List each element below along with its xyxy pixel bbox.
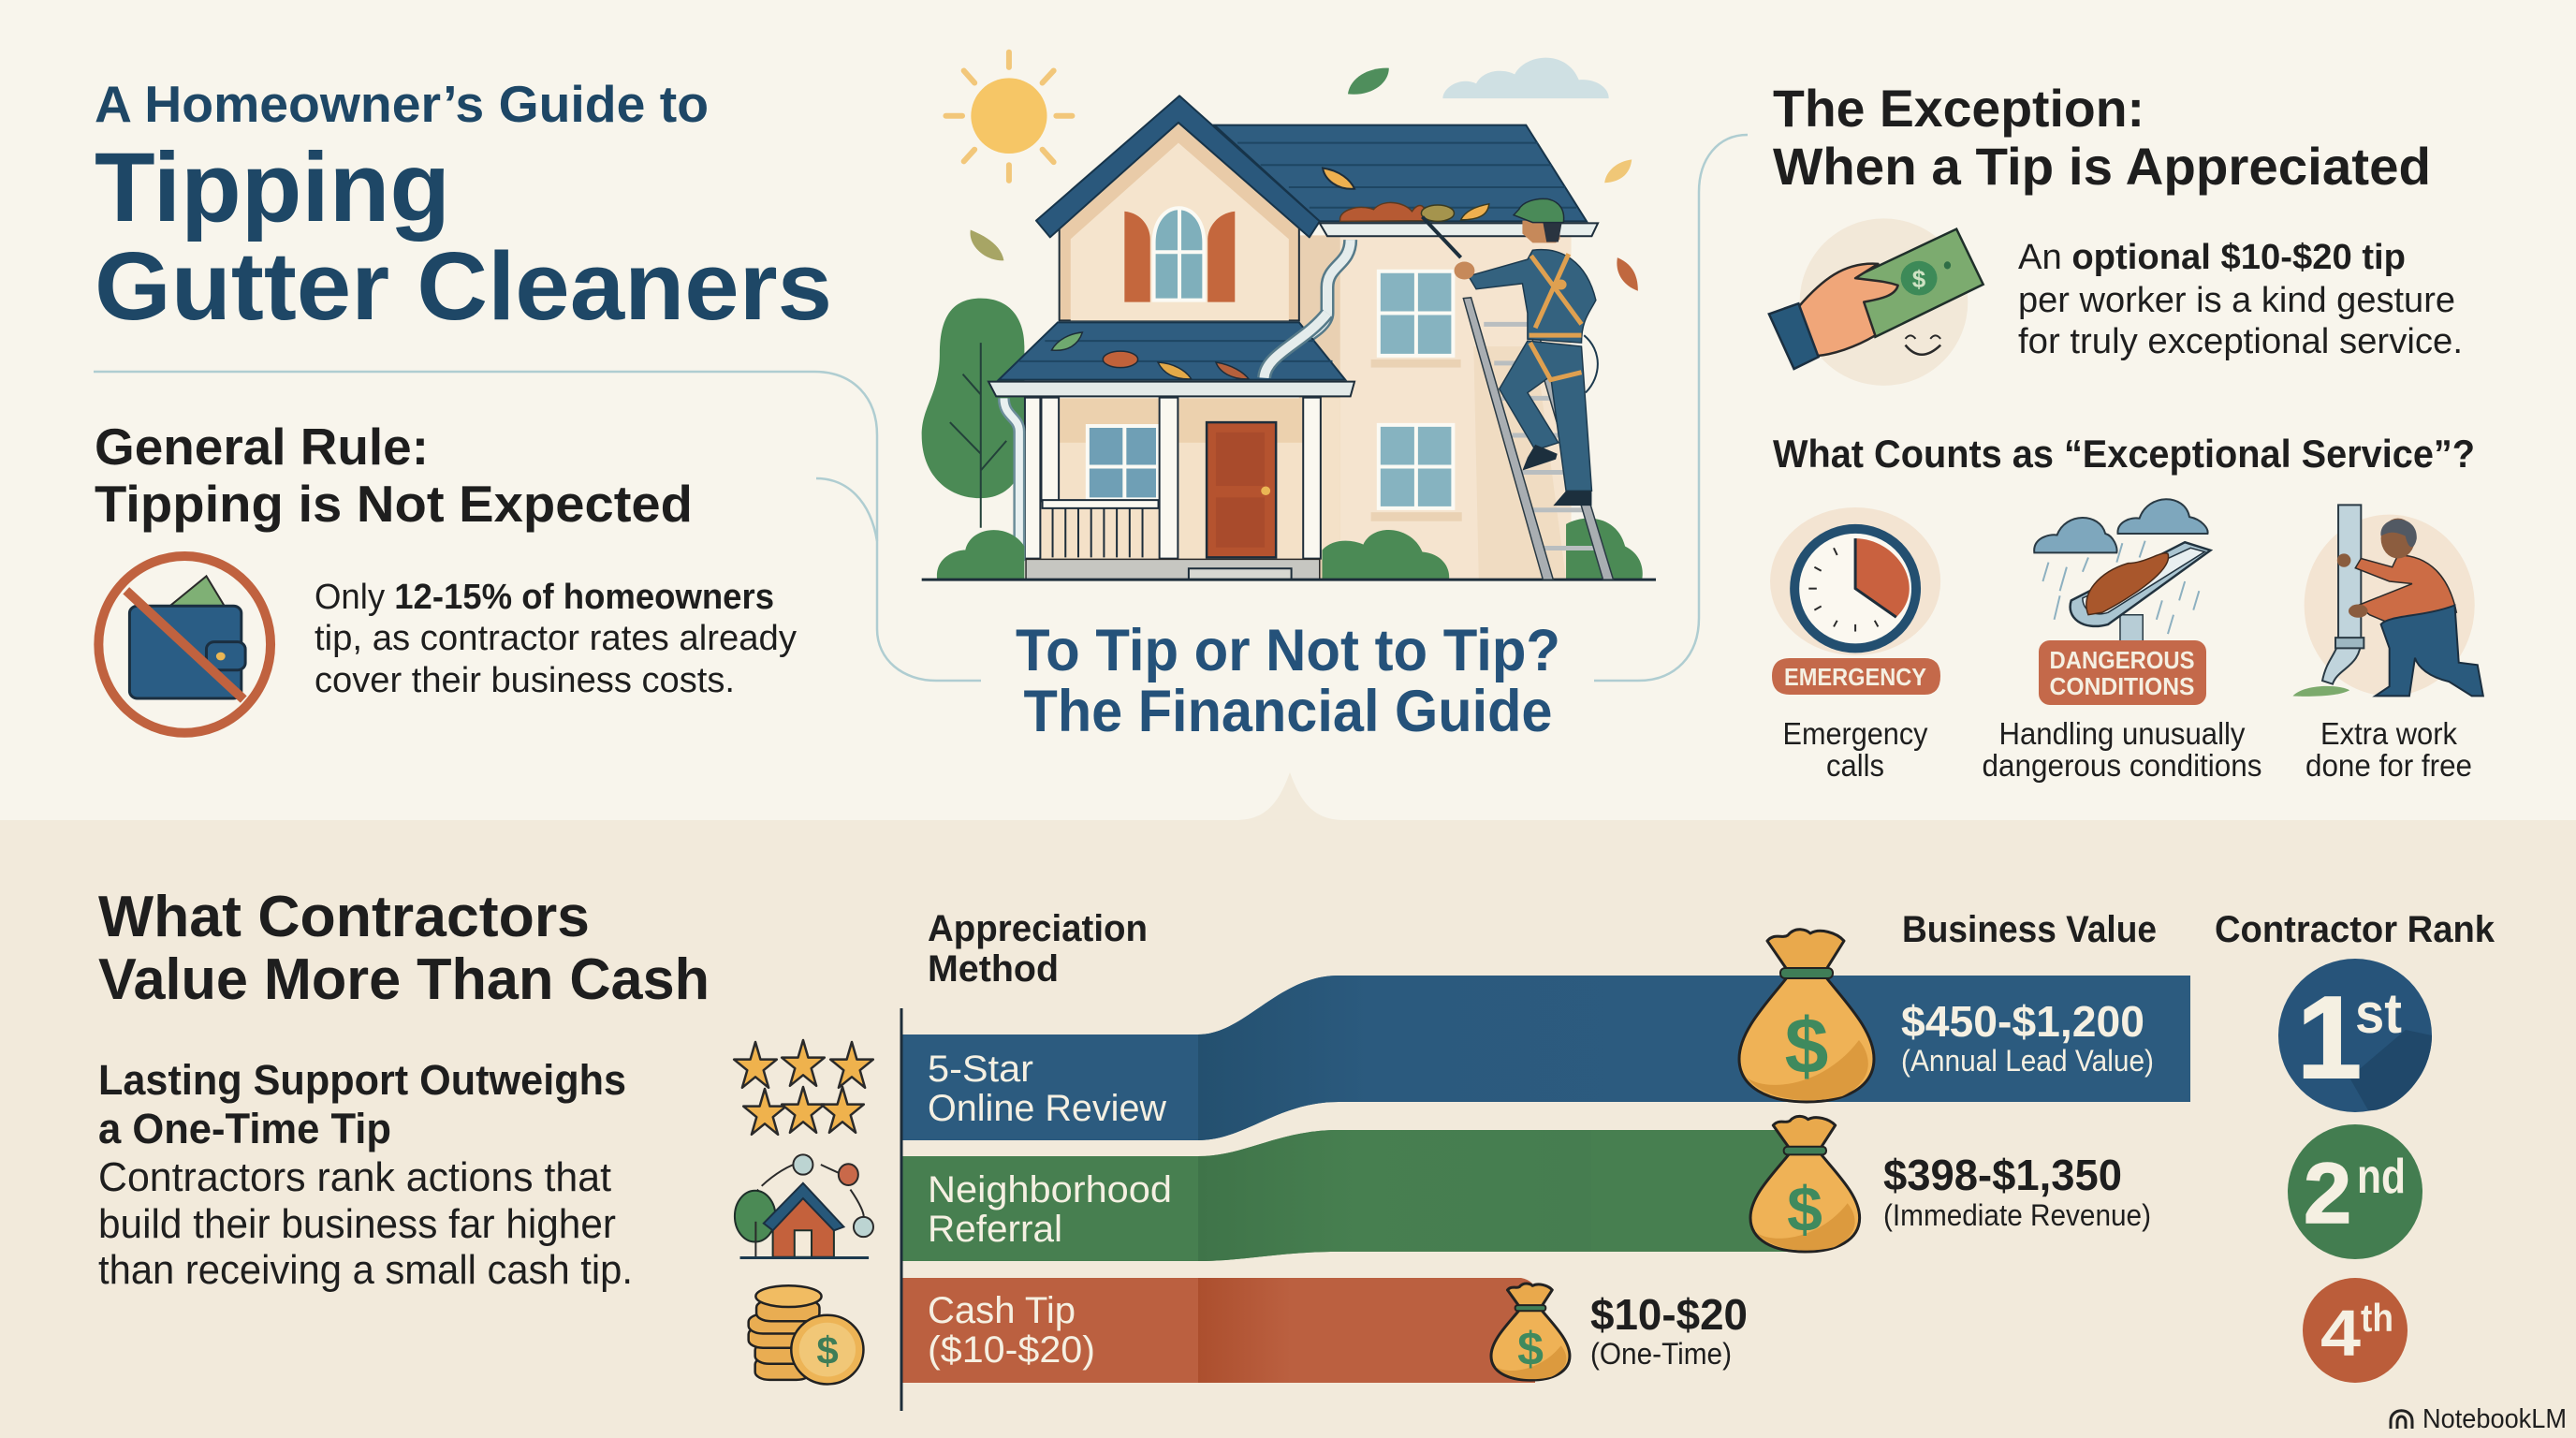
value: cash tip: $10-$20 (1590, 1290, 1748, 1339)
bar: 5-star online review (901, 976, 2190, 1140)
icon: dangerous gutter in storm (2034, 499, 2210, 643)
icon: cloud (1442, 58, 1609, 98)
caption: extra work (2305, 716, 2472, 783)
column header: appreciation method: Method (928, 948, 1059, 990)
tip text: per worker is a kind gesture (2018, 281, 2455, 320)
railing (1043, 500, 1159, 557)
caption: emergency calls: Emergency (1782, 716, 1928, 751)
bar: cash tip: ($10-$20) (928, 1329, 1095, 1371)
rule text (315, 578, 797, 700)
tip text: for truly exceptional service. (2018, 322, 2463, 361)
subheading: Lasting Support Outweighs (98, 1056, 626, 1104)
money bag: green bar: $ (1787, 1174, 1822, 1245)
icon: neighbourhood house (735, 1154, 873, 1258)
bar: neighborhood referral: Neighborhood (928, 1169, 1172, 1211)
description (98, 1154, 633, 1293)
value: review (1901, 997, 2154, 1078)
money bag: orange bar (1491, 1284, 1570, 1380)
walls (1026, 123, 1572, 580)
bar: 5-star online review: Online Review (928, 1088, 1166, 1129)
connector line: right (1594, 135, 1748, 681)
money bag: blue bar (1739, 930, 1874, 1102)
heading: general rule (95, 418, 693, 533)
tip text: An optional $10-$20 tip (2018, 238, 2406, 277)
description: Contractors rank actions that (98, 1154, 611, 1200)
rank 2nd (2288, 1124, 2422, 1259)
icon: hand giving money (1769, 218, 1983, 386)
column header: appreciation method (928, 908, 1148, 990)
upper window with shutters (1124, 208, 1235, 302)
pill: dangerous conditions: DANGEROUS (2050, 646, 2194, 674)
rank 1st: st (2355, 982, 2402, 1045)
rule text: tip, as contractor rates already (315, 619, 797, 658)
rank 1st (2278, 959, 2432, 1112)
tree (922, 299, 1024, 528)
column header: contractor rank: Contractor Rank (2215, 909, 2496, 950)
pill: emergency: EMERGENCY (1784, 663, 1926, 691)
description: build their business far higher (98, 1201, 616, 1247)
main title line 2: Gutter Cleaners (95, 232, 832, 340)
window sills (1371, 360, 1462, 521)
panel: general rule (95, 418, 797, 733)
heading: contractors value (98, 885, 710, 1012)
title block (95, 75, 832, 340)
leaves floating (971, 68, 1638, 291)
rank 4th: 4 (2320, 1297, 2361, 1370)
heading: exceptional service: What Counts as “Exceptional Service”? (1773, 432, 2475, 476)
value: review: (Annual Lead Value) (1901, 1044, 2154, 1078)
value: cash tip: (One-Time) (1590, 1337, 1732, 1371)
heading: contractors value: Value More Than Cash (98, 947, 710, 1012)
bushes (937, 519, 1643, 580)
heading: general rule: General Rule: (95, 418, 429, 476)
porch steps (1026, 559, 1320, 580)
icon: crossed-out wallet (98, 556, 271, 733)
caption: emergency calls: calls (1826, 748, 1884, 783)
icon: stars (734, 1040, 873, 1135)
heading: general rule: Tipping is Not Expected (95, 475, 693, 533)
chart: appreciation flow (734, 908, 2496, 1411)
money bag: green bar (1750, 1116, 1860, 1252)
center title (1016, 618, 1560, 744)
tip text (2018, 238, 2463, 361)
value: referral: $398-$1,350 (1883, 1151, 2122, 1199)
ladder (1463, 298, 1614, 580)
side downspout (1003, 398, 1019, 570)
rank 2nd: nd (2357, 1150, 2406, 1204)
center title: To Tip or Not to Tip? (1016, 618, 1560, 683)
porch columns (1025, 398, 1321, 559)
bar: 5-star online review: 5-Star (928, 1049, 1033, 1090)
caption: dangerous conditions: dangerous conditions (1983, 748, 2261, 783)
heading: the exception: The Exception: (1773, 79, 2144, 138)
bar: cash tip (901, 1278, 1535, 1383)
column header: appreciation method: Appreciation (928, 908, 1148, 949)
caption: dangerous conditions: Handling unusually (1999, 716, 2246, 751)
value: cash tip (1590, 1290, 1748, 1371)
icon: NotebookLM logo (2391, 1411, 2412, 1429)
center title: The Financial Guide (1024, 679, 1552, 744)
money bag: blue bar: $ (1785, 1002, 1828, 1090)
title kicker: A Homeowner’s Guide to (95, 75, 709, 133)
heading: the exception: When a Tip is Appreciated (1773, 137, 2431, 196)
icon: coins (749, 1285, 863, 1384)
downspout (1265, 240, 1351, 378)
main gutter (1320, 223, 1598, 236)
gable roof (1036, 95, 1320, 237)
bar: neighborhood referral: Referral (928, 1209, 1062, 1250)
porch gutter (988, 382, 1354, 396)
illustration: house with gutter cleaner (922, 52, 1656, 580)
coin dollar sign: $ (816, 1328, 839, 1372)
column header: business value: Business Value (1902, 909, 2157, 950)
rank 2nd: 2 (2304, 1146, 2351, 1241)
caption: dangerous conditions (1983, 716, 2261, 783)
ground line (922, 579, 1656, 581)
rule text: Only 12-15% of homeowners (315, 578, 774, 617)
door (1207, 422, 1276, 557)
money bag: orange bar: $ (1517, 1323, 1544, 1375)
connector line: left (94, 372, 981, 681)
subheading (98, 1056, 626, 1152)
watermark: NotebookLM (2422, 1404, 2567, 1434)
pill: dangerous conditions: CONDITIONS (2050, 672, 2194, 700)
value: review: $450-$1,200 (1901, 997, 2144, 1046)
value: referral (1883, 1151, 2151, 1232)
caption: extra work: done for free (2305, 748, 2472, 783)
rule text: cover their business costs. (315, 661, 735, 700)
heading: contractors value: What Contractors (98, 885, 590, 949)
description: than receiving a small cash tip. (98, 1247, 633, 1293)
icon: sun (945, 52, 1072, 181)
subheading: a One-Time Tip (98, 1105, 391, 1152)
rank 4th: th (2361, 1296, 2393, 1340)
icon: emergency clock (1770, 507, 1940, 655)
worker (1422, 198, 1598, 506)
bar: cash tip: Cash Tip (928, 1290, 1076, 1331)
pill: dangerous conditions (2039, 640, 2206, 705)
main title line 1: Tipping (95, 133, 450, 242)
value: referral: (Immediate Revenue) (1883, 1198, 2151, 1232)
dollar sign on bill: $ (1912, 265, 1926, 293)
panel: what contractors value (98, 885, 710, 1293)
bottom section background (0, 772, 2576, 1438)
porch roof (999, 313, 1345, 380)
rank 1st: 1 (2297, 974, 2362, 1103)
axis (900, 1008, 902, 1411)
bar: neighborhood referral (901, 1130, 1802, 1261)
side windows (1379, 271, 1453, 508)
leaves in gutter (1339, 202, 1489, 221)
panel: the exception (1769, 79, 2483, 783)
caption: extra work: Extra work (2320, 716, 2457, 751)
main roof (1214, 125, 1587, 221)
heading: the exception (1773, 79, 2431, 196)
caption: emergency calls (1782, 716, 1928, 783)
porch window (1088, 426, 1158, 499)
rank 4th (2303, 1278, 2408, 1383)
icon: worker fixing downspout (2292, 505, 2483, 697)
